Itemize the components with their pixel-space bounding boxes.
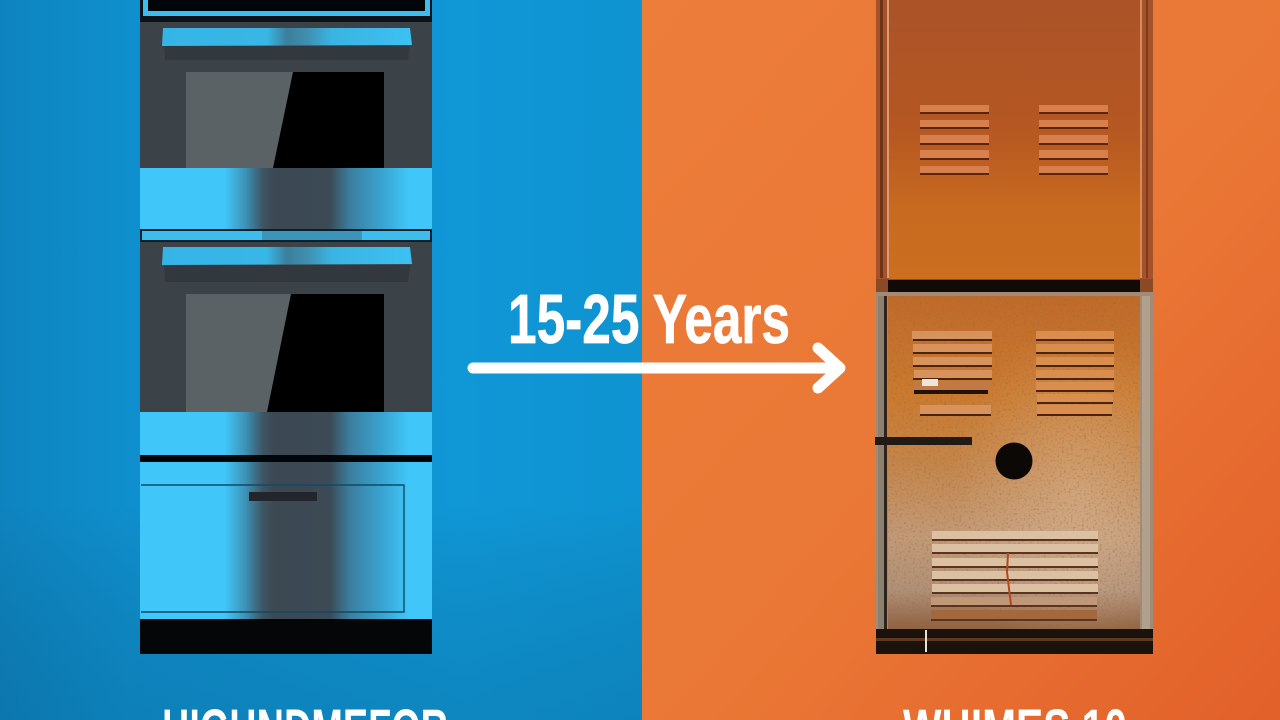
lower steel band — [140, 412, 432, 456]
upper right vent — [1039, 105, 1108, 175]
upper left vent — [920, 105, 989, 175]
arrow: aging over time — [473, 348, 840, 388]
lower right vent — [1036, 331, 1114, 416]
icon: rusted old furnace — [875, 0, 1153, 654]
heading: lifespan label: 15-25 Years — [508, 280, 790, 358]
upper steel band — [140, 168, 432, 229]
panel: orange background — [642, 0, 1280, 720]
bottom vent — [931, 531, 1098, 621]
oven base — [140, 619, 432, 654]
lower oven cavity — [140, 242, 432, 412]
upper oven cavity — [140, 22, 432, 168]
oven top control panel — [140, 0, 432, 22]
bottom drawer — [140, 462, 432, 619]
lower left vent — [912, 331, 992, 416]
thin trim bar — [140, 229, 432, 242]
lower rusty panel — [876, 292, 1153, 637]
furnace latch bar — [875, 437, 972, 445]
panel: blue background — [0, 0, 642, 720]
furnace base — [876, 629, 1153, 654]
panel divider — [876, 279, 1153, 293]
icon: new blue wall oven — [140, 0, 432, 654]
black gap — [140, 455, 432, 462]
furnace round port — [996, 442, 1032, 480]
upper rusty panel — [876, 0, 1153, 282]
